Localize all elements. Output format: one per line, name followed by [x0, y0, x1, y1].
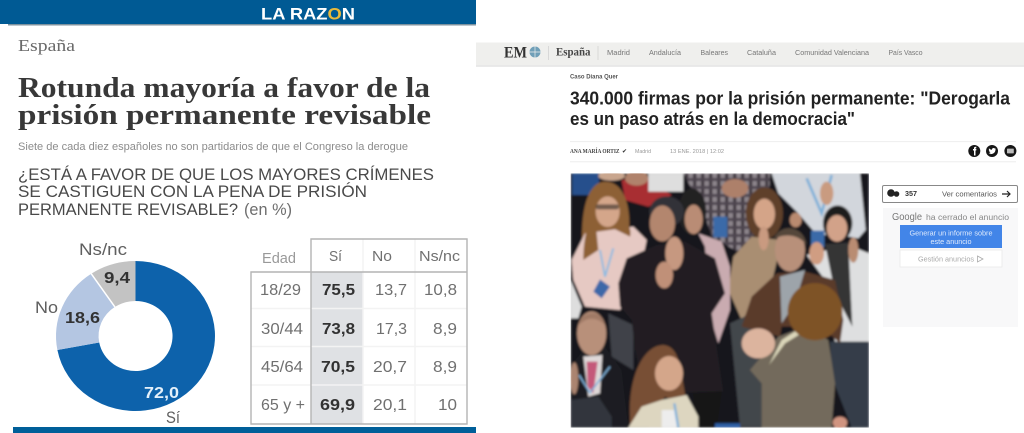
navigation bar: [476, 42, 1024, 67]
headline: prisión permanente revisable: [18, 100, 431, 131]
woman right: [807, 245, 869, 342]
background figures: [572, 173, 599, 195]
byline: ANA MARÍA ORTIZ: [570, 147, 620, 155]
navigation links: Baleares: [700, 50, 728, 57]
row: 45/64: 20,7: [373, 359, 407, 376]
table header: No: [372, 248, 392, 265]
navigation links: [607, 50, 923, 57]
table header: [262, 248, 461, 267]
row: 18/29: 13,7: [375, 282, 407, 299]
survey question: [18, 165, 434, 219]
logo: La Razón: LA RAZ ON: [261, 4, 355, 24]
button: report ad: este anuncio: [930, 237, 972, 246]
photo: applauding crowd: [570, 171, 869, 429]
closed ad panel: [883, 208, 1018, 327]
comments button: Ver comentarios: [942, 190, 997, 198]
byline: [570, 142, 1016, 162]
segment: No 18,6: [56, 274, 115, 350]
donut chart: [35, 241, 215, 427]
row: 18/29: 10,8: [424, 282, 457, 299]
icon: email: [1004, 145, 1016, 157]
woman bottom: [630, 345, 688, 428]
survey question: PERMANENTE REVISABLE?: [18, 201, 238, 219]
label: No: No: [35, 299, 58, 317]
survey question: (en %): [244, 201, 292, 219]
kicker: Caso Diana Quer: [570, 74, 619, 80]
social icons: [968, 145, 1016, 157]
row: 30/44: 17,3: [376, 321, 407, 338]
panel: El Mundo article: [476, 42, 1024, 429]
logo: El Mundo: EM: [504, 44, 527, 62]
byline: 13 ENE. 2018 | 12:02: [670, 149, 724, 155]
button: report ad: [900, 225, 1002, 248]
segment: Sí 72,0: [57, 261, 215, 411]
label: Sí: Sí: [166, 409, 180, 427]
panel: La Razón article: [0, 0, 476, 433]
byline: ✔: [622, 149, 627, 155]
segment: Ns/nc 9,4: [91, 261, 136, 307]
headline: Rotunda mayoría a favor de la: [18, 73, 430, 104]
comments button: 357: [905, 191, 917, 198]
headline: 340.000 firmas por la prisión permanente: "Derogarla: [570, 88, 1011, 108]
subheading: Siete de cada diez españoles no son partidarios de que el Congreso la derogue: [18, 141, 408, 153]
button: report ad: Generar un informe sobre: [910, 228, 992, 238]
navigation links: País Vasco: [888, 50, 923, 57]
icon: twitter: [986, 145, 998, 157]
closed ad panel: Google: [892, 211, 922, 223]
row: 30/44: 30/44: [261, 321, 303, 338]
table header: Edad: [262, 250, 296, 267]
table header: Sí: [329, 248, 343, 265]
headline: es un paso atrás en la democracia": [570, 108, 855, 129]
survey question: SE CASTIGUEN CON LA PENA DE PRISIÓN: [18, 182, 367, 201]
woman middle tan: [746, 187, 783, 239]
header bar: La Razón: [0, 0, 476, 26]
row: 45/64: 45/64: [261, 359, 303, 376]
row: 65 y +: 10: [438, 397, 457, 414]
section label: España: [18, 36, 76, 55]
bald man lower left: [581, 356, 582, 358]
closed ad panel: ha cerrado el anuncio: [926, 213, 1010, 222]
value: 72,0: 72,0: [144, 385, 179, 402]
footer bar: [13, 427, 476, 433]
woman front: [750, 327, 835, 428]
value: 9,4: 9,4: [104, 270, 130, 287]
headline: [570, 88, 1011, 129]
comments button: [882, 186, 1018, 202]
row: 18/29: [260, 282, 457, 299]
label: Ns/nc: Ns/nc: [79, 241, 127, 259]
icon: facebook: [968, 145, 980, 157]
navigation links: Cataluña: [747, 50, 776, 57]
row: 65 y +: 20,1: [373, 397, 407, 414]
icon: speech bubbles: [887, 189, 899, 197]
byline: Madrid: [635, 149, 651, 155]
navigation links: Comunidad Valenciana: [795, 50, 869, 57]
headline: [18, 73, 431, 131]
button: manage ads: Gestión anuncios: [918, 254, 974, 264]
woman left blonde: [580, 180, 632, 239]
navigation links: Madrid: [607, 50, 630, 57]
section name: España: [556, 46, 591, 58]
man behind pink shirt: [698, 233, 730, 343]
row: 30/44: 73,8: [322, 321, 355, 338]
man brown jacket: [742, 272, 843, 343]
row: 18/29: 75,5: [322, 282, 355, 299]
age table: [251, 239, 467, 424]
row: 18/29: 18/29: [260, 282, 301, 299]
row: 45/64: 8,9: [433, 359, 457, 376]
row: 65 y +: 69,9: [320, 397, 355, 414]
row: 30/44: 8,9: [433, 321, 457, 338]
icon: arrow: [1002, 191, 1010, 197]
row: 45/64: 70,5: [321, 359, 355, 376]
row: 65 y +: 65 y +: [261, 397, 305, 414]
row: 45/64: [261, 359, 457, 376]
navigation links: Andalucía: [649, 50, 681, 57]
row: 30/44: [261, 321, 457, 338]
man center: [618, 242, 725, 393]
row: 65 y +: [261, 397, 457, 414]
survey question: ¿ESTÁ A FAVOR DE QUE LOS MAYORES CRÍMENES: [18, 165, 434, 184]
table header: Ns/nc: [419, 248, 461, 265]
value: 18,6: 18,6: [65, 310, 100, 327]
